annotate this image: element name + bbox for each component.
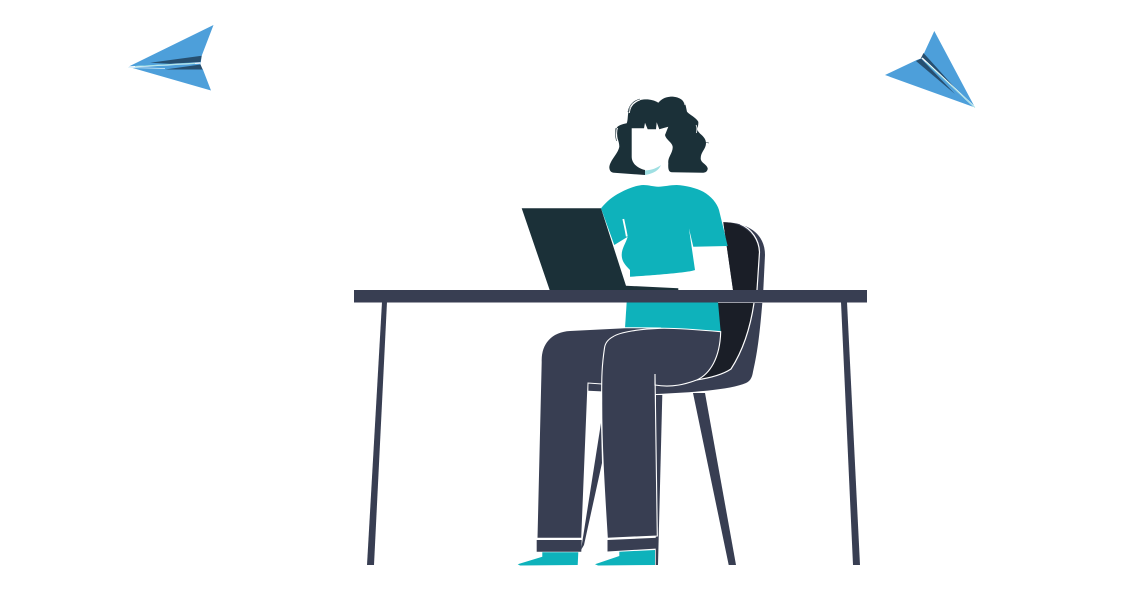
icon: right paper plane (885, 31, 975, 108)
laptop (522, 208, 678, 291)
upper shirt (601, 185, 728, 277)
chair (581, 222, 765, 565)
front trouser leg (602, 328, 721, 552)
shirt fold line (623, 219, 627, 236)
hair (609, 97, 708, 175)
back trouser leg (537, 328, 660, 552)
hair highlight lines (615, 98, 709, 143)
chair seat and back lower (588, 303, 762, 394)
neck shadow (645, 165, 661, 175)
icon: left paper plane (128, 25, 214, 90)
chair legs (693, 393, 736, 565)
table (354, 290, 867, 565)
lower shirt (625, 302, 721, 332)
chair back upper (723, 222, 765, 290)
shoes (518, 550, 655, 566)
